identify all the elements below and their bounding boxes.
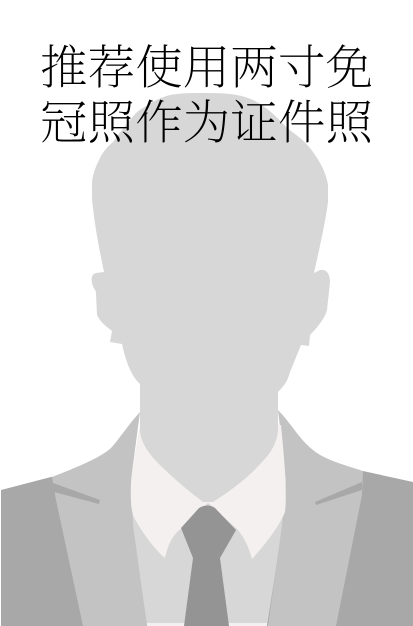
shirt bottom edge (147, 623, 267, 626)
head and neck (92, 93, 330, 502)
title line 2: 冠照作为证件照 (40, 98, 373, 150)
title line 1: 推荐使用两寸免 (40, 43, 373, 95)
jacket shoulders (1, 470, 413, 626)
left lapel notch (53, 483, 100, 504)
title (40, 43, 373, 150)
right lapel (268, 410, 363, 626)
shirt (130, 470, 290, 626)
right lapel notch (315, 482, 362, 505)
left lapel (52, 412, 147, 626)
collar (131, 425, 286, 559)
tie (181, 506, 236, 626)
